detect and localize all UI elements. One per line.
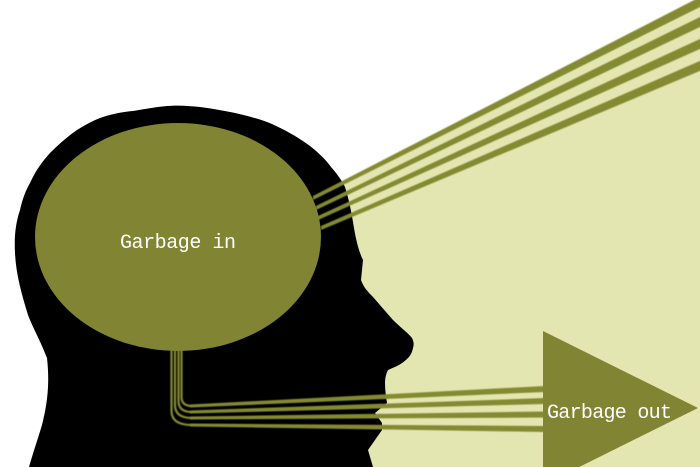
outgoing wires [172, 345, 545, 432]
output triangle [543, 331, 698, 467]
label: Garbage in: Garbage in [120, 232, 236, 255]
incoming beams [313, 0, 700, 230]
label: Garbage out: Garbage out [547, 402, 672, 425]
brain ellipse [35, 123, 321, 351]
light cone of incoming information [320, 0, 700, 467]
head silhouette [15, 106, 414, 467]
